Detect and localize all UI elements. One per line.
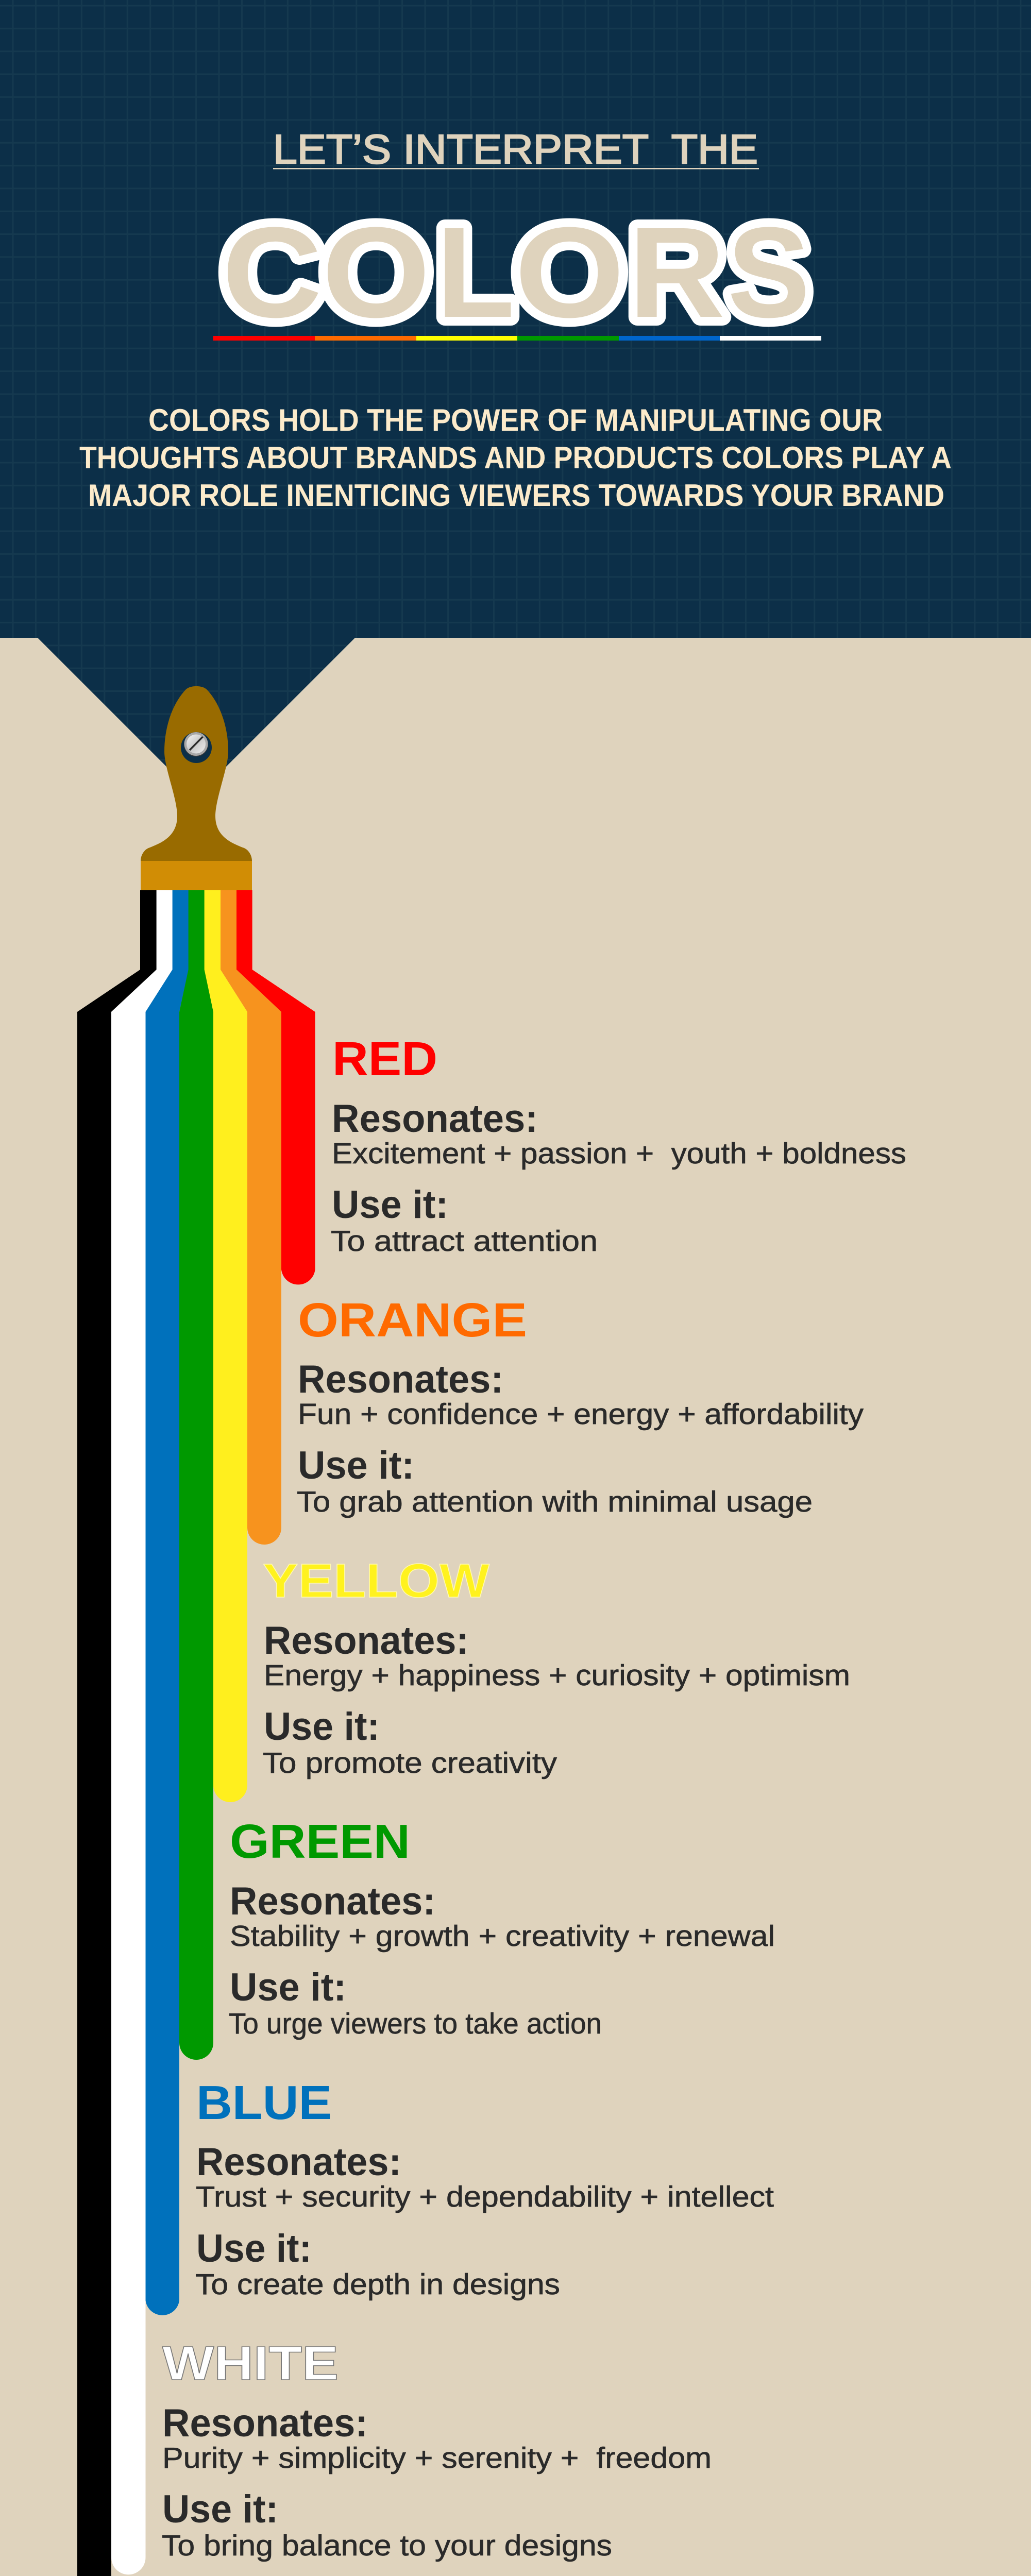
- panel: green: Use it:: [230, 1965, 346, 2009]
- title: colors: O: [515, 200, 624, 344]
- panel: white: To bring balance to your designs: [162, 2529, 612, 2562]
- heading: let's interpret the: LET’S INTERPRET THE: [273, 126, 758, 172]
- panel: green: [229, 1815, 775, 2040]
- panel: green: Stability + growth + creativity + renewal: [230, 1920, 775, 1953]
- panel: orange: Fun + confidence + energy + affordability: [298, 1398, 864, 1431]
- panel: yellow: [263, 1554, 850, 1780]
- title: colors: R: [629, 200, 725, 344]
- panel: green: GREEN: [230, 1815, 410, 1868]
- panel: white: Resonates:: [162, 2401, 368, 2445]
- intro text block: THOUGHTS ABOUT BRANDS AND PRODUCTS COLORS PLAY A: [79, 440, 952, 475]
- title: colors: S: [728, 200, 810, 344]
- panel: red: [331, 1032, 906, 1258]
- panel: white: [162, 2336, 712, 2562]
- title: colors: O: [322, 200, 430, 344]
- panel: blue: Resonates:: [196, 2140, 401, 2184]
- panel: yellow: To promote creativity: [263, 1747, 557, 1780]
- panel: orange: ORANGE: [298, 1293, 527, 1347]
- panel: white: Purity + simplicity + serenity + freedom: [162, 2442, 712, 2475]
- panel: orange: To grab attention with minimal usage: [297, 1485, 813, 1518]
- panel: orange: Use it:: [298, 1444, 414, 1487]
- panel: orange: [297, 1293, 864, 1518]
- panel: blue: Use it:: [196, 2227, 312, 2270]
- title: colors: [222, 200, 810, 344]
- panel: orange: Resonates:: [298, 1358, 503, 1401]
- panel: red: To attract attention: [331, 1225, 598, 1258]
- intro text block: COLORS HOLD THE POWER OF MANIPULATING OUR: [148, 403, 883, 437]
- panel: navy header background: [0, 0, 1031, 824]
- title: colors: C: [222, 200, 322, 344]
- panel: green: To urge viewers to take action: [229, 2007, 602, 2040]
- icon: paint brush stripes: [77, 890, 315, 2576]
- title: colors: L: [436, 200, 515, 344]
- panel: red: Use it:: [332, 1183, 448, 1227]
- rainbow underline: [213, 336, 821, 341]
- panel: blue: Trust + security + dependability + intellect: [196, 2180, 774, 2213]
- panel: red: Resonates:: [332, 1097, 538, 1141]
- panel: green: Resonates:: [230, 1879, 435, 1923]
- panel: white: WHITE: [162, 2336, 339, 2390]
- panel: yellow: YELLOW: [263, 1554, 489, 1607]
- intro text block: [79, 403, 952, 513]
- panel: yellow: Use it:: [264, 1705, 380, 1749]
- panel: blue: [195, 2076, 774, 2301]
- panel: yellow: Energy + happiness + curiosity + optimism: [264, 1659, 850, 1692]
- intro text block: MAJOR ROLE INENTICING VIEWERS TOWARDS YOUR BRAND: [88, 478, 944, 513]
- panel: blue: BLUE: [196, 2076, 332, 2129]
- panel: yellow: Resonates:: [264, 1619, 469, 1663]
- panel: blue: To create depth in designs: [195, 2268, 560, 2301]
- panel: red: Excitement + passion + youth + boldness: [332, 1137, 906, 1170]
- icon: paint brush handle: [141, 686, 252, 890]
- panel: beige body with notch: [0, 638, 1031, 2576]
- panel: red: RED: [332, 1032, 437, 1086]
- panel: white: Use it:: [162, 2487, 278, 2531]
